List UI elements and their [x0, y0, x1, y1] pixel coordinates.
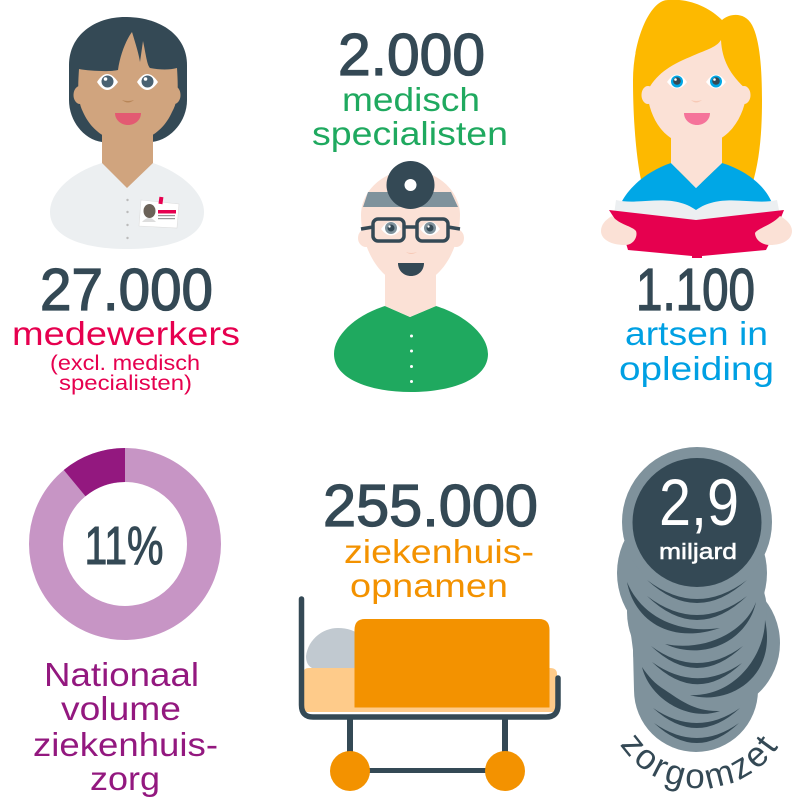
illustration: resident with book [601, 0, 792, 258]
illustration: employee [50, 17, 204, 249]
illustration: hospital bed [302, 599, 558, 791]
label: Nationaal volume ziekenhuiszorg: volume [61, 690, 181, 727]
stat: 1.100 artsen in opleiding: opleiding [619, 350, 774, 387]
stat: 255.000 ziekenhuisopnamen [323, 473, 538, 604]
stat: 2.000 medisch specialisten [312, 22, 508, 152]
illustration: specialist [334, 161, 488, 392]
stat: 27.000 medewerkers: medewerkers [12, 315, 240, 352]
stat: 255.000 ziekenhuisopnamen: ziekenhuis- [344, 533, 534, 570]
stat: 2.000 medisch specialisten: specialisten [312, 115, 508, 152]
label: Nationaal volume ziekenhuiszorg [33, 656, 218, 797]
illustration: coin stack 2,9 miljard: 2,9 [659, 465, 739, 539]
donut chart: 11% [46, 448, 204, 623]
label: Nationaal volume ziekenhuiszorg: ziekenhuis- [33, 726, 218, 763]
stat: 2.000 medisch specialisten: 2.000 [338, 22, 485, 88]
label: Nationaal volume ziekenhuiszorg: zorg [90, 760, 160, 797]
stat: 255.000 ziekenhuisopnamen: 255.000 [323, 473, 538, 539]
coin edges [627, 580, 767, 743]
stat: 27.000 medewerkers: 27.000 [40, 257, 213, 323]
stat: 1.100 artsen in opleiding: 1.100 [636, 257, 755, 323]
donut chart: 11%: 11% [84, 516, 164, 576]
stat: 27.000 medewerkers: (excl. medisch [50, 352, 200, 375]
label: zorgomzet curved: zorgomzet [620, 734, 778, 792]
illustration: coin stack 2,9 miljard [617, 447, 780, 752]
stat: 27.000 medewerkers [12, 257, 240, 395]
stat: 27.000 medewerkers: specialisten) [59, 372, 192, 395]
label: Nationaal volume ziekenhuiszorg: Nationaal [44, 656, 199, 693]
stat: 1.100 artsen in opleiding [619, 257, 774, 387]
stat: 255.000 ziekenhuisopnamen: opnamen [350, 567, 508, 604]
stat: 2.000 medisch specialisten: medisch [342, 81, 480, 118]
stat: 1.100 artsen in opleiding: artsen in [625, 315, 768, 352]
illustration: coin stack 2,9 miljard: miljard [659, 539, 737, 564]
